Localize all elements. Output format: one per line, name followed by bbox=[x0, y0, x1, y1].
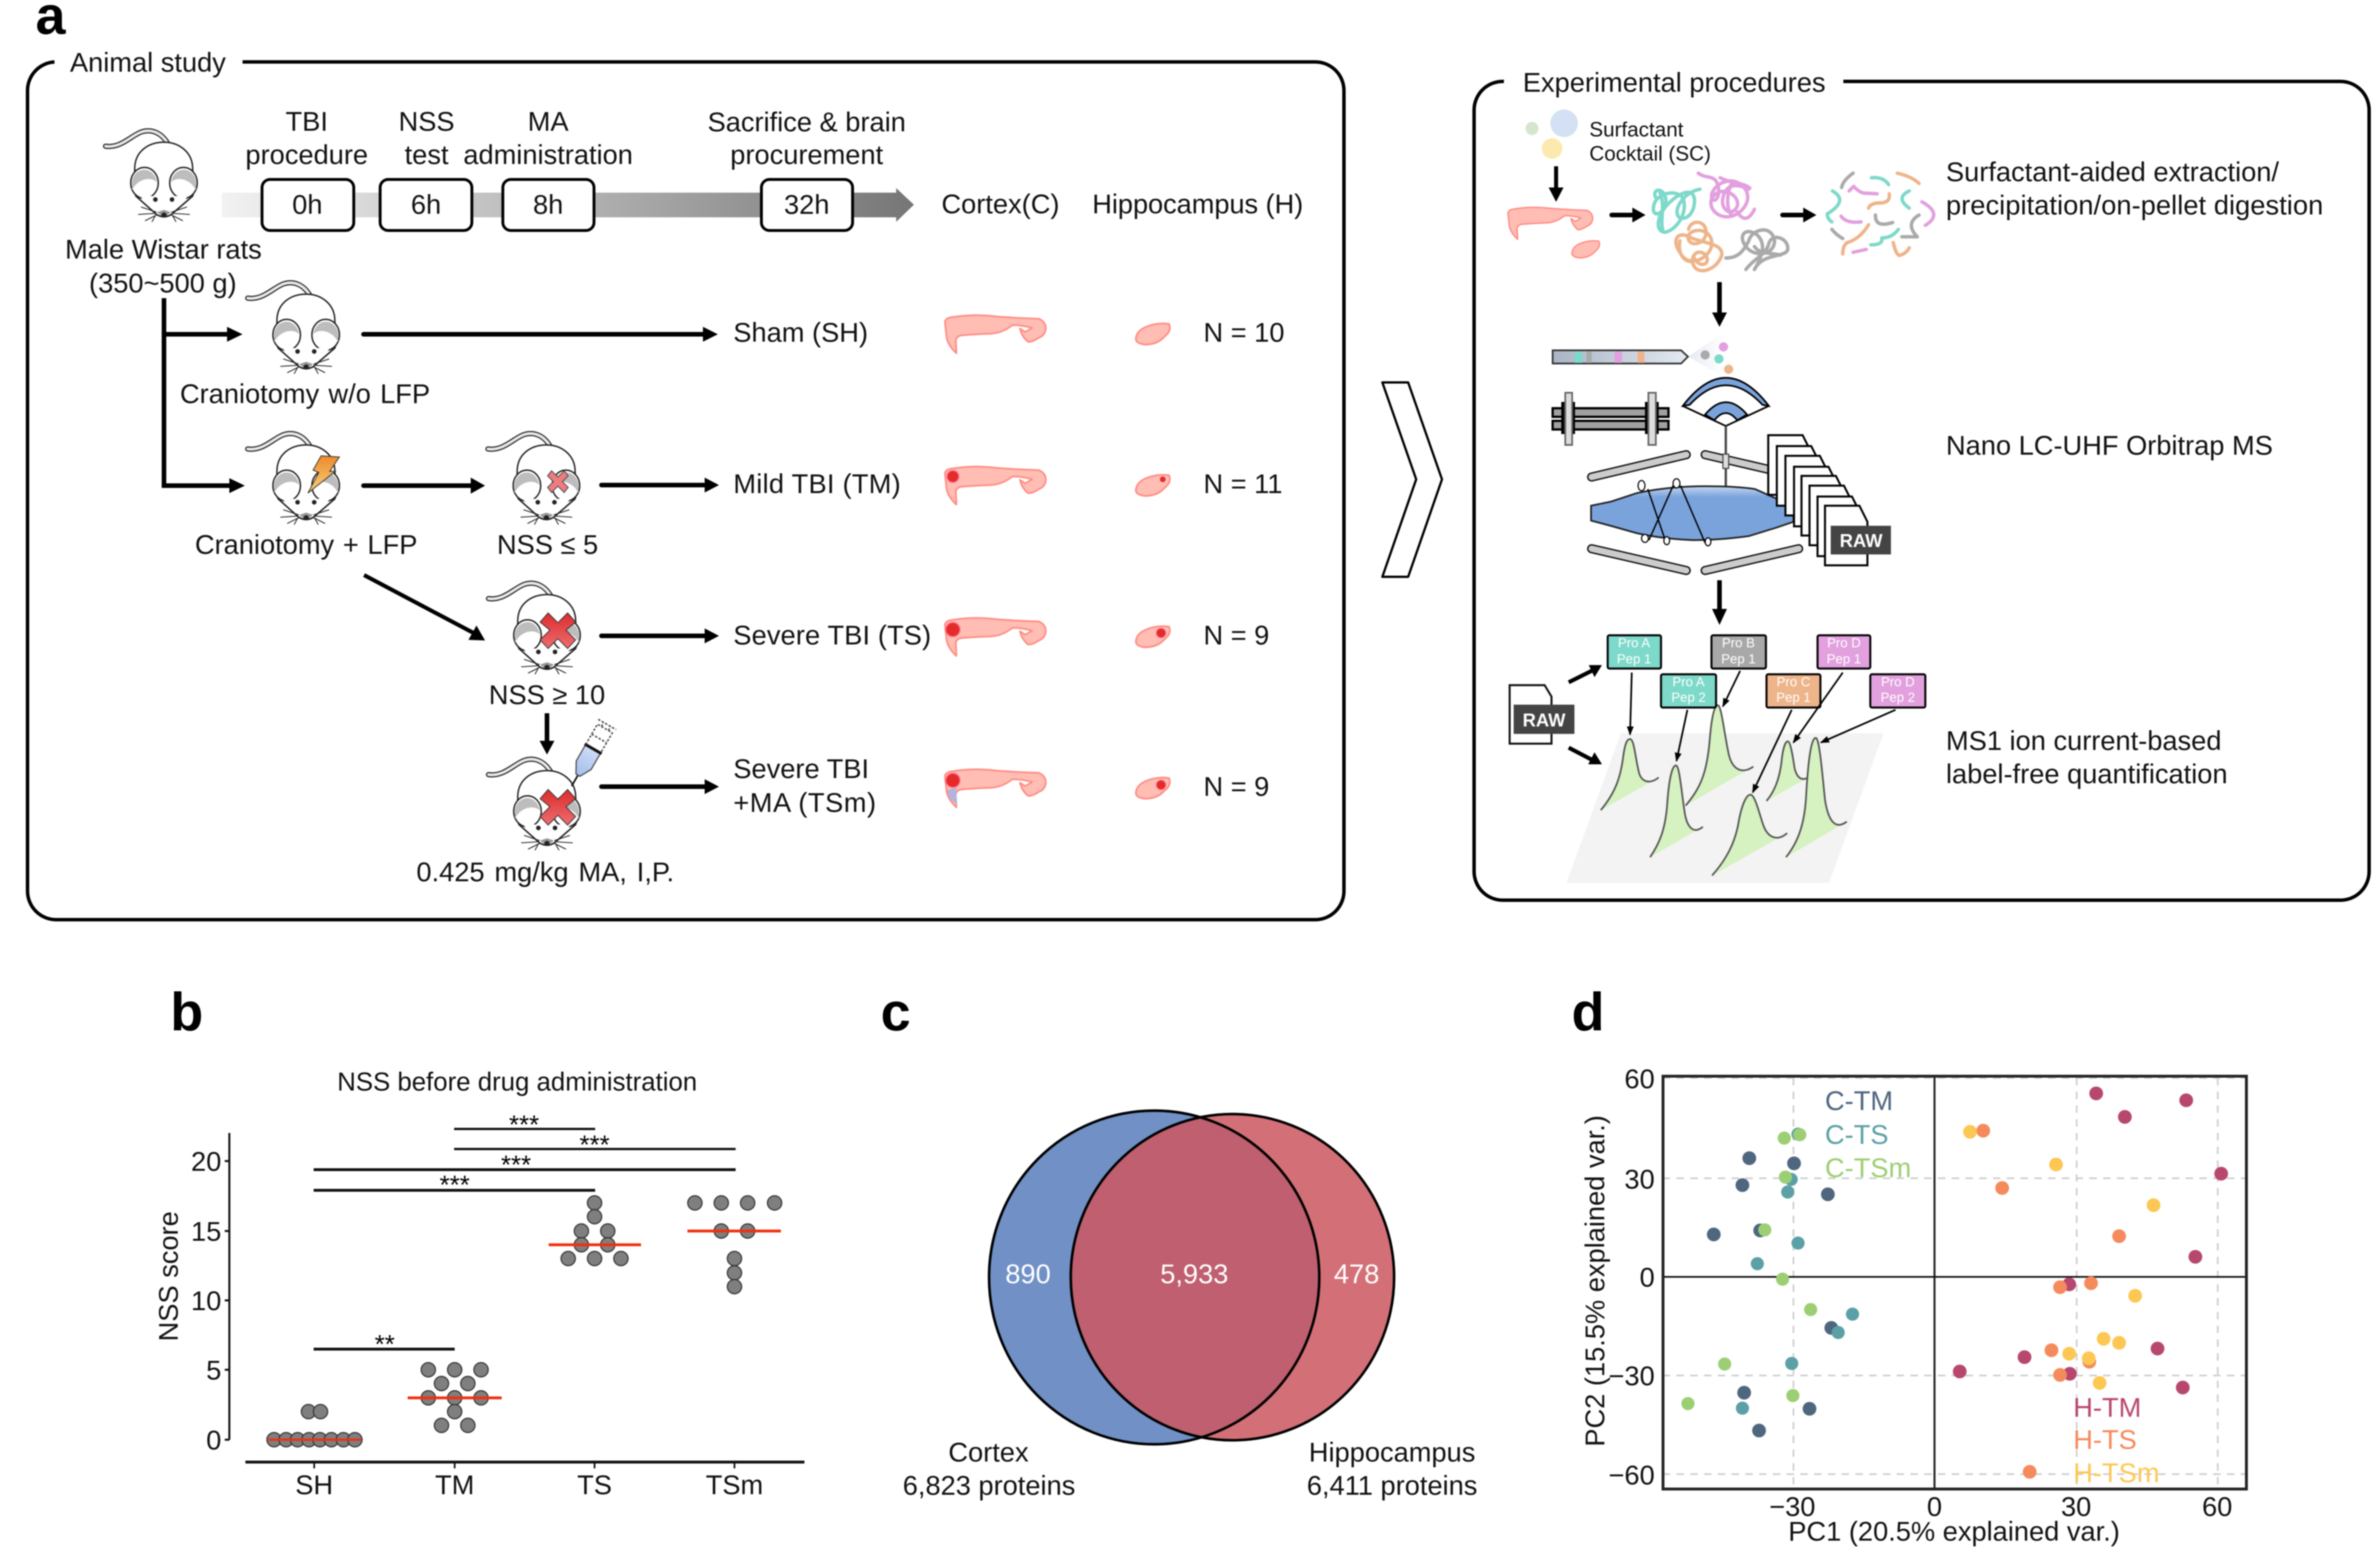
x axis title: PC1 (20.5% explained var.) bbox=[1788, 1517, 2120, 1547]
panel label c: c bbox=[881, 982, 910, 1042]
venn counts: 5,933 bbox=[1160, 1259, 1228, 1289]
panel: venn diagram bbox=[902, 1111, 1478, 1501]
label: cortex proteins: 6,823 proteins bbox=[902, 1471, 1076, 1501]
y axis tick labels: 0 bbox=[1640, 1263, 1655, 1293]
label: craniotomy with LFP: Craniotomy + LFP bbox=[195, 530, 417, 560]
gridlines bbox=[1663, 1078, 2246, 1489]
panel frame bbox=[1474, 81, 2369, 900]
tissue row: severe TBI plus MA bbox=[945, 769, 1269, 807]
label: male wistar rats: (350~500 g) bbox=[89, 268, 237, 299]
x axis tick labels: 30 bbox=[2061, 1492, 2091, 1522]
arrow: branch trunk to sham and craniotomy bbox=[164, 298, 245, 493]
icon: RAW file bbox=[1510, 685, 1574, 744]
label: severe TBI group: Severe TBI (TS) bbox=[733, 620, 931, 651]
y axis: 0 bbox=[206, 1425, 221, 1456]
arrow: to severe TBI bbox=[601, 628, 719, 643]
data points: TSm bbox=[687, 1196, 782, 1294]
arrow: to drug treated rat bbox=[540, 713, 554, 755]
tissue row: mild TBI bbox=[945, 467, 1283, 505]
peptide tags: Pro D bbox=[1881, 674, 1914, 689]
label: extraction step bbox=[1946, 157, 2323, 221]
arrow: to mild TBI bbox=[601, 478, 719, 493]
icon: nano LC column bbox=[1553, 333, 1733, 377]
chart title: NSS before drug administration bbox=[337, 1067, 697, 1096]
x axis: SH bbox=[295, 1470, 333, 1500]
peptide tags bbox=[1608, 635, 1925, 708]
legend: hippocampus groups: H-TSm bbox=[2073, 1458, 2159, 1488]
panel: NSS chart bbox=[154, 1067, 804, 1500]
timeline labels: TBI bbox=[286, 107, 328, 137]
y axis tick labels: −60 bbox=[1608, 1460, 1655, 1491]
icon: ion funnel bbox=[1683, 378, 1769, 426]
label: drug dose: 0.425 mg/kg MA, I,P. bbox=[416, 857, 674, 888]
label: hippocampus proteins: 6,411 proteins bbox=[1307, 1471, 1478, 1501]
points: H-TSm bbox=[1963, 1125, 2160, 1390]
x axis: TM bbox=[435, 1470, 474, 1500]
heading: experimental procedures: Experimental procedures bbox=[1523, 68, 1826, 98]
arrow: to treated group bbox=[601, 779, 719, 794]
icon: quadrupole rods bbox=[1553, 393, 1668, 445]
tissue row: mild TBI: N = 11 bbox=[1203, 469, 1283, 499]
label: surfactant cocktail bbox=[1589, 118, 1711, 165]
icon: treated rat with syringe bbox=[488, 720, 616, 850]
x axis tick labels bbox=[1769, 1492, 2232, 1522]
legend: hippocampus groups: H-TS bbox=[2073, 1425, 2137, 1455]
x axis tick labels: 0 bbox=[1927, 1492, 1942, 1522]
timeline labels: Sacrifice & brain bbox=[708, 107, 906, 138]
timeline labels: procedure bbox=[245, 140, 368, 170]
points: C-TM bbox=[1707, 1151, 1838, 1437]
label: NSS at least 10: NSS ≥ 10 bbox=[489, 680, 605, 710]
tissue row: sham: N = 10 bbox=[1203, 318, 1284, 348]
x axis tick labels: −30 bbox=[1769, 1492, 1815, 1522]
peptide tags: Pro A bbox=[1672, 674, 1705, 689]
peptide tags: Pep 2 bbox=[1881, 690, 1915, 705]
label: craniotomy without LFP: Craniotomy w/o LFP bbox=[180, 379, 430, 409]
timeline arrow: 0h bbox=[292, 190, 322, 220]
icon: brain tissue bbox=[1508, 208, 1600, 258]
label: surfactant cocktail: Cocktail (SC) bbox=[1589, 142, 1711, 165]
panel label b: b bbox=[170, 982, 203, 1042]
peptide tags: Pep 1 bbox=[1721, 651, 1756, 666]
peptide tags: Pep 1 bbox=[1776, 690, 1811, 705]
peptide tags: Pep 2 bbox=[1671, 690, 1706, 705]
icon: RAW file stack: RAW bbox=[1840, 530, 1883, 551]
icon: ion trap rods and orbitrap bbox=[1591, 426, 1799, 570]
timeline labels: test bbox=[405, 140, 448, 170]
label: male wistar rats bbox=[65, 235, 262, 299]
panel label d: d bbox=[1572, 982, 1604, 1042]
arrow: RAW to peptide list bbox=[1569, 665, 1602, 682]
plot frame bbox=[1663, 1076, 2246, 1489]
tissue row: severe TBI bbox=[945, 618, 1269, 656]
y axis: 5 bbox=[206, 1355, 221, 1386]
label: cortex proteins: Cortex bbox=[948, 1437, 1029, 1468]
timeline labels: MA bbox=[527, 107, 569, 137]
label: treated group bbox=[733, 754, 876, 818]
timeline arrow: 8h bbox=[533, 190, 563, 220]
legend: cortex groups bbox=[1825, 1086, 1911, 1183]
peptide tags: Pep 1 bbox=[1617, 651, 1651, 666]
tissue row: sham bbox=[945, 315, 1284, 353]
label: treated group: +MA (TSm) bbox=[733, 788, 876, 818]
x axis tick labels: 60 bbox=[2202, 1492, 2232, 1522]
peptide tags: Pro C bbox=[1777, 674, 1810, 689]
icon: peptide fragments bbox=[1827, 173, 1934, 255]
label: male wistar rats: Male Wistar rats bbox=[65, 235, 262, 265]
points: C-TSm bbox=[1681, 1128, 1818, 1410]
arrow: proteins to peptides bbox=[1783, 208, 1816, 222]
data points: SH bbox=[267, 1405, 362, 1447]
timeline labels bbox=[245, 107, 906, 170]
peptide tags: Pro D bbox=[1827, 635, 1861, 650]
venn counts: 478 bbox=[1334, 1259, 1379, 1289]
label: sham group: Sham (SH) bbox=[733, 318, 868, 348]
label: NSS at most 5: NSS ≤ 5 bbox=[497, 530, 598, 560]
label: extraction step: precipitation/on-pellet digestion bbox=[1946, 190, 2323, 221]
legend: hippocampus groups bbox=[2073, 1393, 2159, 1488]
label: treated group: Severe TBI bbox=[733, 754, 869, 784]
legend: cortex groups: C-TS bbox=[1825, 1120, 1889, 1150]
arrow: to severe NSS bbox=[364, 575, 485, 640]
timeline labels: procurement bbox=[730, 140, 883, 170]
y axis tick labels: 30 bbox=[1624, 1164, 1655, 1195]
label: quantification step bbox=[1946, 726, 2227, 790]
peptide tags: Pro B bbox=[1722, 635, 1755, 650]
venn circles bbox=[989, 1111, 1394, 1444]
heading: animal study: Animal study bbox=[70, 48, 226, 78]
tissue row: severe TBI: N = 9 bbox=[1203, 620, 1269, 651]
y axis: 20 bbox=[191, 1147, 221, 1177]
arrow: tissue to proteins bbox=[1612, 208, 1646, 222]
label: surfactant cocktail: Surfactant bbox=[1589, 118, 1683, 141]
significance brackets: ** bbox=[374, 1330, 395, 1359]
arrow: RAW to chromatograms bbox=[1569, 748, 1602, 764]
legend: cortex groups: C-TSm bbox=[1825, 1153, 1911, 1183]
x axis: TS bbox=[577, 1470, 612, 1500]
label: extraction step: Surfactant-aided extraction/ bbox=[1946, 157, 2280, 187]
arrow: MS to quantification bbox=[1712, 580, 1727, 625]
y axis bbox=[191, 1133, 229, 1456]
icon: RAW file: RAW bbox=[1523, 710, 1566, 730]
icon: protein tangles bbox=[1654, 173, 1788, 271]
icon: severe TBI rat bbox=[488, 583, 580, 674]
label: cortex proteins bbox=[902, 1437, 1076, 1501]
icon: mild TBI rat bbox=[488, 433, 580, 525]
panel: animal study bbox=[28, 48, 1344, 920]
label: quantification step: MS1 ion current-based bbox=[1946, 726, 2222, 756]
icon: surfactant cocktail bubbles bbox=[1525, 110, 1578, 159]
y axis tick labels: −30 bbox=[1608, 1361, 1655, 1392]
legend: cortex groups: C-TM bbox=[1825, 1086, 1893, 1116]
icon: sham rat bbox=[248, 283, 339, 374]
label: mild TBI group: Mild TBI (TM) bbox=[733, 469, 901, 499]
significance brackets: *** bbox=[580, 1130, 609, 1159]
venn counts bbox=[1005, 1259, 1379, 1289]
icon: LFP rat with lightning bbox=[248, 433, 339, 525]
arrows: tags to peaks bbox=[1630, 671, 1896, 792]
peptide tags: Pro A bbox=[1618, 635, 1651, 650]
timeline labels: administration bbox=[463, 140, 633, 170]
arrow: chevron between panels bbox=[1382, 382, 1442, 577]
significance brackets bbox=[314, 1110, 736, 1359]
timeline labels: NSS bbox=[398, 107, 455, 137]
significance brackets: *** bbox=[501, 1150, 531, 1179]
icon: starting rat bbox=[105, 131, 197, 222]
icon: RAW file stack bbox=[1768, 435, 1891, 565]
y axis title: NSS score bbox=[154, 1211, 184, 1342]
column heading: cortex: Cortex(C) bbox=[941, 189, 1060, 220]
legend: hippocampus groups: H-TM bbox=[2073, 1393, 2141, 1423]
y axis title: PC2 (15.5% explained var.) bbox=[1580, 1115, 1611, 1447]
y axis: 10 bbox=[191, 1286, 221, 1316]
chart: extracted ion chromatograms bbox=[1566, 705, 1883, 883]
arrow: peptides to LC-MS bbox=[1712, 282, 1727, 327]
arrow: to mild NSS bbox=[364, 478, 485, 494]
timeline arrow bbox=[222, 179, 914, 230]
x axis bbox=[245, 1462, 804, 1500]
x axis: TSm bbox=[706, 1470, 763, 1500]
points: C-TS bbox=[1736, 1127, 1859, 1415]
panel frame bbox=[28, 62, 1344, 920]
tissue row: severe TBI plus MA: N = 9 bbox=[1203, 772, 1269, 802]
label: quantification step: label-free quantification bbox=[1946, 759, 2227, 790]
points: H-TS bbox=[1976, 1124, 2126, 1479]
label: hippocampus proteins: Hippocampus bbox=[1309, 1437, 1475, 1468]
points: H-TM bbox=[1953, 1087, 2228, 1394]
y axis: 15 bbox=[191, 1217, 221, 1247]
timeline arrow: 32h bbox=[784, 190, 830, 220]
label: MS step: Nano LC-UHF Orbitrap MS bbox=[1946, 431, 2273, 461]
venn counts: 890 bbox=[1005, 1259, 1051, 1289]
timeline arrow: 6h bbox=[411, 190, 441, 220]
peptide tags: Pep 1 bbox=[1827, 651, 1861, 666]
column heading: hippocampus: Hippocampus (H) bbox=[1092, 189, 1303, 220]
panel: experimental procedures bbox=[1474, 68, 2369, 900]
y axis tick labels bbox=[1608, 1064, 1655, 1491]
data points: TS bbox=[549, 1196, 641, 1266]
data points: TM bbox=[408, 1362, 502, 1432]
panel: PCA plot bbox=[1580, 1064, 2246, 1547]
y axis tick labels: 60 bbox=[1624, 1064, 1655, 1095]
zero lines bbox=[1663, 1076, 2246, 1489]
significance brackets: *** bbox=[509, 1110, 539, 1139]
significance brackets: *** bbox=[440, 1170, 470, 1199]
arrow: to sham bbox=[364, 327, 718, 342]
label: hippocampus proteins bbox=[1307, 1437, 1478, 1501]
arrow: surfactant to tissue bbox=[1549, 166, 1564, 202]
